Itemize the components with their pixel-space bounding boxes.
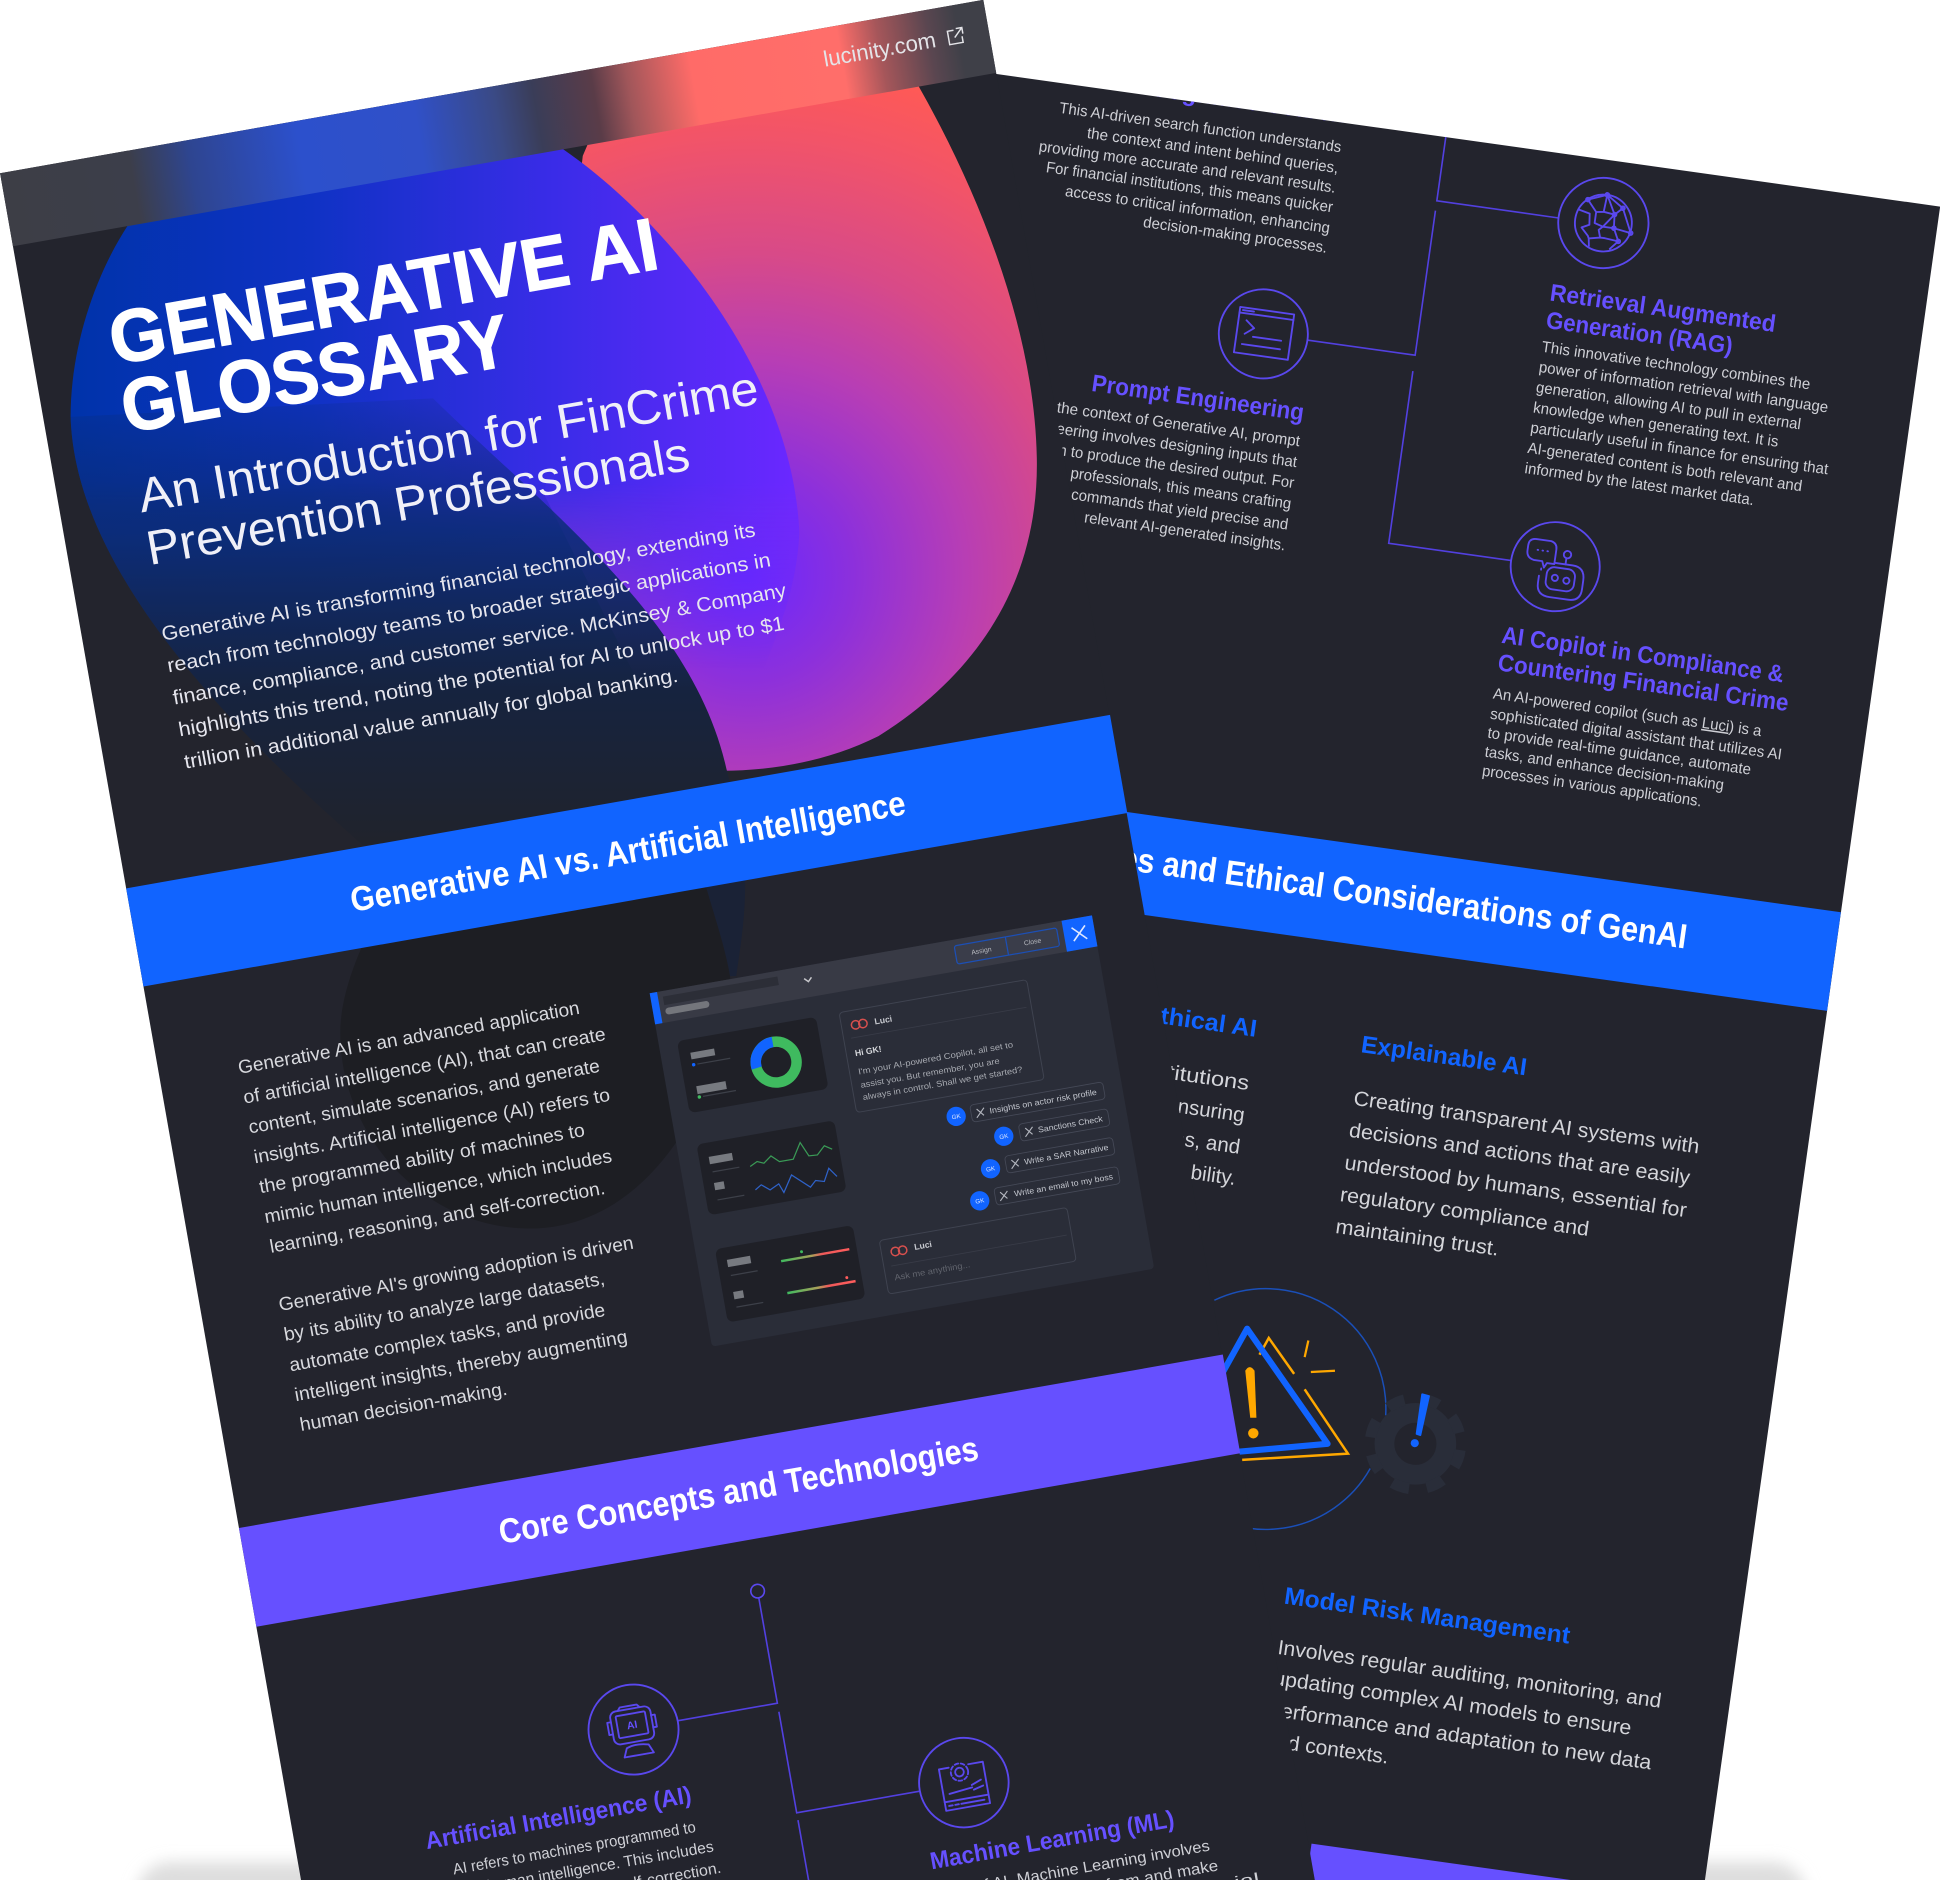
text: explainable AI (1336, 1092, 1698, 1256)
text: RAG description: particularly useful in finance for ensuring that (1529, 420, 1830, 478)
heading: RAG (1547, 284, 1776, 358)
connector lines (1308, 137, 1558, 562)
text: explainable AI: understood by humans, essential for (1343, 1151, 1688, 1222)
text: intro: finance, compliance, and customer service. McKinsey & Company (171, 580, 788, 710)
text: definition paragraph: the programmed ability of machines to (257, 1119, 586, 1197)
heading: AI Copilot: AI Copilot in Compliance & (1500, 622, 1786, 688)
heading: Artificial Intelligence: Artificial Intelligence (AI) (423, 1782, 694, 1855)
heading: Cognitive Search: Cognitive Search (1149, 75, 1348, 129)
text: copilot description: sophisticated digital assistant that utilizes AI (1489, 706, 1783, 764)
text: search description (1029, 98, 1343, 257)
front page sheet (0, 0, 1327, 1880)
button group: assign / close (954, 928, 1060, 964)
text: model risk: Involves regular auditing, monitoring, and (1276, 1636, 1663, 1713)
text: definition paragraph: insights. Artificial intelligence (AI) refers to (252, 1084, 612, 1167)
suggestion: SAR: GK (986, 1165, 997, 1174)
band: next section (1310, 1844, 1570, 1880)
text: ML description (899, 1830, 1261, 1880)
icon: gear (1364, 1393, 1466, 1495)
chat card: Luci greeting: always in control. Shall we get started? (862, 1064, 1024, 1102)
text: definition paragraph (236, 993, 633, 1257)
suggestion: email: Write an email to my boss (1013, 1172, 1114, 1199)
text: prompt description: aim to produce the desired output. For (1042, 440, 1295, 492)
icon: orange exclamation (1245, 1367, 1259, 1438)
text: model risk: performance and adaptation to new data (1268, 1698, 1654, 1774)
text: definition paragraph: content, simulate scenarios, and generate (247, 1055, 601, 1137)
text: AI description: AI refers to machines programmed to (452, 1819, 697, 1878)
text: search description: This AI-driven search function understands (1058, 100, 1343, 156)
icon: AI robot (581, 1677, 686, 1782)
suggestion: SAR (979, 1137, 1116, 1180)
title: GLOSSARY (115, 299, 515, 449)
text: model risk: and contexts. (1263, 1729, 1390, 1769)
panel: back page (996, 74, 1940, 1880)
subtitle: Prevention Professionals (142, 427, 694, 576)
suggestion: actor risk (945, 1081, 1106, 1128)
text: definition paragraph: of artificial intelligence (AI), that can create (242, 1023, 607, 1108)
text: adoption paragraph: Generative AI's growing adoption is driven (277, 1232, 635, 1315)
band: challenges and ethics (1126, 812, 1841, 1011)
chat card: Luci greeting: Hi GK! (854, 1044, 882, 1058)
logo: Luci (851, 1019, 868, 1030)
text: intro: Generative AI is transforming financial technology, extending its (160, 519, 757, 646)
text: search description: providing more accurate and relevant results. (1038, 138, 1337, 197)
text: RAG description: This innovative technology combines the (1541, 339, 1811, 393)
card: line charts (696, 1120, 847, 1215)
text: RAG description: generation, allowing AI to pull in external (1535, 379, 1802, 433)
chat card: Luci greeting: Luci (874, 1014, 893, 1027)
decorative navy streak (700, 866, 745, 976)
chat card: input: Ask me anything... (894, 1259, 971, 1282)
heading: RAG: Generation (RAG) (1544, 307, 1734, 360)
text: copilot description: An AI-powered copilot (such as Luci) is a (1492, 686, 1763, 740)
text: search description: access to critical information, enhancing (1064, 183, 1331, 237)
text: RAG description: power of information retrieval with language (1538, 359, 1829, 417)
band: generative vs artificial (126, 715, 1127, 986)
link: lucinity.com: lucinity.com (821, 27, 938, 72)
chat card: input (879, 1207, 1076, 1294)
icon: prompt terminal (1218, 288, 1309, 380)
suggestion: sanctions: GK (999, 1133, 1010, 1141)
text: copilot description: to provide real-time guidance, automate (1486, 725, 1752, 779)
icon: orange triangle (1242, 1338, 1348, 1460)
suggestion: SAR: Write a SAR Narrative (1024, 1143, 1110, 1167)
icon: orange sparks (1305, 1340, 1335, 1372)
heading: Machine Learning: Machine Learning (ML) (928, 1806, 1176, 1875)
text: RAG description (1525, 341, 1828, 505)
panel: copilot dashboard (650, 915, 1154, 1347)
subtitle: An Introduction for FinCrime (134, 361, 762, 523)
hero: blue blob (70, 149, 800, 644)
band: core concepts (239, 1355, 1240, 1627)
suggestion: email: GK (975, 1197, 986, 1206)
text: explainable AI: decisions and actions that are easily (1348, 1119, 1692, 1190)
icon: external link (947, 27, 964, 45)
heading: AI Copilot (1498, 627, 1788, 711)
hero: coral blob (544, 62, 1037, 771)
text: intro: reach from technology teams to broader strategic applications in (166, 549, 772, 677)
text: copilot description: tasks, and enhance decision-making (1484, 744, 1725, 794)
band: core concepts: Core Concepts and Technologies (496, 1430, 981, 1552)
text: prompt description: professionals, this means crafting (1069, 465, 1292, 513)
text: prompt description (1058, 402, 1300, 550)
suggestion: sanctions: Sanctions Check (1037, 1114, 1104, 1135)
chat card: Luci greeting: I'm your AI-powered Copilot, all set to (857, 1039, 1014, 1077)
text: RAG description: informed by the latest market data. (1524, 460, 1755, 509)
text: explainable AI: regulatory compliance and (1339, 1183, 1591, 1241)
icon: copilot chat robot (1510, 521, 1601, 612)
heading: Model Risk Management: Model Risk Management (1283, 1583, 1572, 1650)
text: copilot description (1482, 688, 1782, 806)
text: intro: trillion in additional value annually for global banking. (183, 665, 680, 774)
dashboard header (650, 915, 1097, 1024)
text: ethical AI: in using AI fairly, ensuring (1013, 1072, 1246, 1127)
dashboard body (650, 915, 1154, 1347)
front page content (0, 0, 1328, 1880)
icon: blue triangle (1175, 1329, 1328, 1457)
back page sheet (676, 68, 1940, 1880)
text: copilot description: processes in various applications. (1481, 763, 1703, 810)
icon: machine learning (912, 1731, 1016, 1834)
title: GENERATIVE AI (103, 202, 664, 381)
text: adoption paragraph: human decision-making. (298, 1378, 509, 1435)
connector start node (750, 1583, 765, 1599)
hero: navy fade overlay (71, 398, 742, 845)
text: ethical AI: promoting fairness, and (1026, 1106, 1242, 1159)
heading: Explainable AI: Explainable AI (1359, 1031, 1529, 1081)
text: explainable AI: Creating transparent AI systems with (1352, 1087, 1701, 1158)
button group: assign / close: Assign (971, 946, 992, 957)
heading: AI Copilot: Countering Financial Crime (1496, 650, 1790, 717)
decorative dark circle (340, 854, 730, 1229)
chat card: Luci greeting (839, 980, 1044, 1113)
text: explainable AI: maintaining trust. (1334, 1215, 1500, 1261)
text: ethical AI (1171, 1065, 1248, 1188)
band: challenges and ethics: Challenges and Ethical Considerations of GenAI (991, 821, 1689, 956)
chat card: Luci greeting: assist you. But remember, you are (860, 1056, 1001, 1090)
subtitle (133, 361, 772, 576)
icon: risk warning illustration (1175, 1289, 1466, 1529)
text: prompt description: commands that yield precise and (1070, 486, 1289, 534)
icon: blue exclamation (1411, 1394, 1429, 1447)
back page content (1038, 96, 1841, 1880)
ground shadow (136, 1862, 1806, 1880)
panel: front page (0, 0, 1328, 1880)
text: search description: the context and intent behind queries, (1086, 125, 1339, 177)
card: risk sliders (715, 1225, 866, 1322)
text: prompt description: relevant AI-generated insights. (1083, 509, 1286, 554)
text: prompt description: In the context of Generative AI, prompt (1039, 397, 1302, 450)
heading: RAG: Retrieval Augmented (1548, 280, 1777, 338)
icon: AI robot: AI (626, 1719, 638, 1732)
suggestion: actor risk: Insights on actor risk profile (989, 1088, 1098, 1116)
text: search description: decision-making processes. (1142, 214, 1328, 257)
text: definition paragraph: Generative AI is an advanced application (236, 997, 581, 1078)
heading: Ethical AI: Ethical AI (1142, 1000, 1259, 1043)
text: model risk: updating complex AI models to ensure (1272, 1667, 1633, 1740)
text: definition paragraph: learning, reasoning, and self-correction. (268, 1177, 607, 1257)
text: intro: highlights this trend, noting the potential for AI to unlock up to $1 (177, 613, 786, 741)
heading: Prompt Engineering: Prompt Engineering (1090, 370, 1306, 427)
suggestion: actor risk: GK (951, 1113, 962, 1121)
suggestion: sanctions (993, 1108, 1110, 1147)
text: RAG description: knowledge when generating text. It is (1532, 399, 1780, 451)
text: adoption paragraph: by its ability to analyze large datasets, (282, 1268, 606, 1345)
band: generative vs artificial: Generative AI vs. Artificial Intelligence (347, 785, 908, 920)
arc ring (1175, 1289, 1386, 1529)
text: ethical AI: accountability. (1107, 1149, 1237, 1190)
button group: assign / close: Close (1023, 937, 1042, 947)
text: adoption paragraph: intelligent insights, thereby augmenting (293, 1326, 629, 1405)
suggestion: email (969, 1166, 1121, 1212)
text: search description: For financial institutions, this means quicker (1045, 159, 1334, 216)
text: adoption paragraph: automate complex tasks, and provide (288, 1299, 607, 1375)
chat card: input: Luci (913, 1239, 933, 1252)
text: adoption paragraph (277, 1232, 656, 1435)
card: donut chart (677, 1017, 829, 1113)
text: definition paragraph: mimic human intelligence, which includes (263, 1145, 614, 1227)
text: model risk (1278, 1640, 1661, 1770)
close button (1061, 915, 1097, 952)
header bar (0, 0, 996, 246)
text: prompt description: engineering involves designing inputs that (1019, 415, 1299, 471)
text: intro (160, 516, 799, 774)
icon: RAG globe (1557, 176, 1650, 270)
connector lines (659, 1577, 959, 1880)
text: RAG description: AI-generated content is both relevant and (1526, 440, 1803, 495)
text: ethical AI: Guiding financial institutions (956, 1031, 1251, 1095)
donut (752, 1038, 800, 1086)
